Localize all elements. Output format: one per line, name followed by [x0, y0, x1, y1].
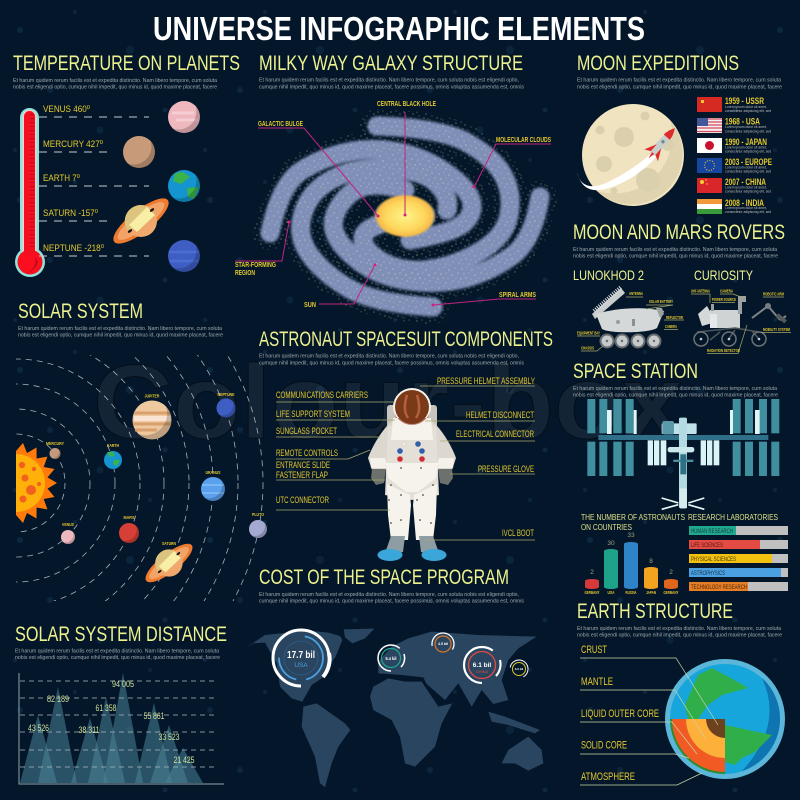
lunokhod labels: CAMERA [665, 324, 677, 329]
temperature labels: NEPTUNE -218⁰ [43, 243, 104, 254]
icon: astronaut figure [368, 388, 456, 561]
chart title: astronauts [581, 512, 685, 532]
icon: sun [16, 443, 57, 523]
icon: rocket with trail [577, 122, 682, 190]
panel: earth structure [577, 600, 785, 785]
text block: milky way intro [259, 78, 525, 90]
text block: space station intro: nobis est eligendi optio, cumque nihil impedit, quo minus id, quod maxime placeat, facere [573, 392, 778, 398]
planet labels: PLUTO [252, 512, 264, 517]
expedition notes: Lorem ipsum dolor sit amet, [725, 206, 767, 210]
icon: earth cutaway [665, 659, 785, 779]
bar labels: GERMANY [584, 590, 600, 595]
lunokhod labels: EQUIPMENT BAY [577, 330, 600, 336]
main title: UNIVERSE INFOGRAPHIC ELEMENTS [153, 10, 645, 47]
planet labels: MARS [124, 515, 134, 520]
thermometer [15, 108, 45, 277]
bar chart: number of astronauts [581, 512, 685, 595]
panel: space station [573, 360, 788, 595]
gauge: Russia [430, 631, 456, 657]
planet labels: EARTH [107, 443, 119, 448]
planet labels: VENUS [62, 522, 74, 527]
curiosity labels [691, 288, 791, 354]
bar values: 33 [627, 532, 635, 539]
bar: astrophysics: ASTROPHYSICS [691, 571, 725, 577]
temperature labels: SATURN -157⁰ [43, 208, 98, 219]
expedition notes: consectetur adipiscing elit, sed [725, 150, 771, 154]
chart values: 94 005 [112, 679, 134, 690]
gauge: China [464, 647, 500, 683]
expedition years: 1959 - USSR [725, 96, 764, 107]
text block: solar intro [18, 326, 223, 338]
astronaut labels: IVCL BOOT [502, 528, 534, 539]
chart values: 43 526 [28, 723, 49, 734]
panel: cost of space program [247, 566, 543, 787]
galaxy labels: MOLECULAR CLOUDS [496, 137, 551, 144]
bar values: 30 [607, 540, 615, 547]
heading: cost: COST OF THE SPACE PROGRAM [259, 566, 509, 589]
cylinder bars [585, 542, 678, 589]
astronaut labels: PRESSURE GLOVE [478, 464, 534, 475]
flag: Europe [697, 158, 722, 173]
chart values: 55 861 [144, 711, 164, 722]
expedition notes: Lorem ipsum dolor sit amet, [725, 146, 767, 150]
astronaut labels: ELECTRICAL CONNECTOR [456, 429, 534, 440]
galaxy labels: CENTRAL BLACK HOLE [377, 101, 436, 108]
gauge: Russia: 4.5 bil [438, 642, 448, 646]
curiosity labels: POWER SOURCE [712, 297, 736, 302]
expedition years [725, 96, 772, 209]
gauge: USA [273, 630, 330, 686]
text block: solar intro: nobis est eligendi optio, cumque nihil impedit, quo minus id, quod maxime placeat, facere [18, 332, 223, 338]
temperature labels: MERCURY 427⁰ [43, 139, 103, 150]
bar labels [584, 590, 678, 595]
subheading: lunokhod: LUNOKHOD 2 [573, 267, 644, 283]
expedition notes: consectetur adipiscing elit, sed [725, 210, 771, 214]
chart values: 82 189 [47, 694, 69, 705]
galaxy labels: STAR-FORMING [235, 262, 276, 269]
planet labels: JUPITER [144, 394, 160, 398]
chart values: 61 358 [96, 703, 116, 714]
bar labels: GERMANY [664, 590, 678, 595]
icon: moon [582, 104, 684, 206]
expedition years: 2007 - CHINA [725, 177, 766, 188]
text block: astronaut intro [259, 354, 525, 366]
panel: rovers [573, 221, 791, 354]
orbits [16, 355, 264, 601]
icon: saturn [107, 191, 175, 251]
chart values: 33 523 [158, 732, 180, 743]
lunokhod labels: ANTENNA [629, 291, 643, 296]
icon: mercury [50, 448, 61, 459]
astronaut labels: FASTENER FLAP [276, 470, 328, 481]
icon: neptune [168, 240, 200, 272]
bar: physical sciences: PHYSICAL SCIENCES [691, 557, 736, 563]
chart values: 38 311 [78, 725, 100, 736]
gauge: Japan: 3.3 bil [515, 667, 523, 671]
temperature labels: VENUS 460⁰ [43, 104, 90, 115]
text block: temperature intro: Et harum quidem rerum facilis est et expedita distinctio. Nam libero tempore, cum soluta [13, 78, 217, 84]
expedition notes [725, 105, 771, 214]
earth callout lines [580, 658, 718, 785]
bar values: 8 [649, 558, 653, 565]
text block: rovers intro: nobis est eligendi optio, cumque nihil impedit, quo minus id, quod maxime placeat, facere [573, 254, 778, 260]
curiosity labels: RADIATION DETECTOR [707, 348, 740, 353]
expedition years: 1968 - USA [725, 116, 760, 128]
expedition notes: Lorem ipsum dolor sit amet, [725, 186, 767, 190]
expedition notes: consectetur adipiscing elit, sed [725, 130, 771, 134]
chart values: 21 425 [174, 755, 194, 766]
earth labels [581, 644, 659, 783]
earth labels: LIQUID OUTER CORE [581, 708, 659, 720]
icon: pluto [249, 520, 267, 538]
chart values [28, 679, 194, 766]
heading: distance: SOLAR SYSTEM DISTANCE [15, 623, 227, 646]
gauge: China: 6.1 bil [473, 662, 491, 669]
galaxy callout lines [235, 112, 551, 306]
heading: space station: SPACE STATION [573, 360, 698, 383]
heading: temperature: TEMPERATURE ON PLANETS [13, 52, 240, 75]
text block: space station intro [573, 386, 778, 398]
panel: astronaut [259, 328, 553, 561]
heading: solar system: SOLAR SYSTEM [18, 300, 143, 323]
temperature labels: EARTH 7⁰ [43, 173, 80, 184]
galaxy labels: SUN [304, 302, 316, 309]
icon: mercury [123, 136, 155, 168]
bar labels: RUSSIA [626, 590, 637, 595]
text block: earth intro [577, 626, 782, 638]
curiosity labels: UHF ANTENNA [691, 288, 710, 294]
panel: moon expeditions [577, 52, 782, 214]
flags and years [697, 96, 772, 214]
icon: earth [104, 451, 122, 469]
expedition notes: consectetur adipiscing elit, sed [725, 170, 771, 174]
astronaut labels: SUNGLASS POCKET [276, 426, 337, 437]
bar labels: JAPAN [646, 590, 656, 595]
icon: jupiter [132, 400, 172, 440]
expedition notes: Lorem ipsum dolor sit amet, [725, 166, 767, 170]
astronaut labels: LIFE SUPPORT SYSTEM [276, 409, 350, 420]
planet labels [46, 392, 264, 546]
galaxy labels: REGION [235, 270, 255, 277]
text block: astronaut intro: Et harum quidem rerum facilis est et expedita distinctio. Nam libero tempore, cum soluta nobis est eligendi optio, [259, 354, 519, 360]
text block: rovers intro [573, 247, 778, 260]
curiosity labels: CAMERA [720, 288, 733, 294]
curiosity labels: ROBOTIC ARM [763, 292, 784, 296]
icon: venus [168, 101, 200, 133]
panel: solar system [16, 304, 267, 601]
text block: astronaut intro: cumque nihil impedit, quo minus id, quod maxime placeat, facere possimus, omnis voluptas assumenda est, omnis [259, 360, 525, 366]
expedition years: 1990 - JAPAN [725, 137, 767, 148]
text block: temperature intro [13, 78, 217, 90]
expedition years: 2008 - INDIA [725, 198, 764, 209]
lunokhod labels: CHASSIS [581, 346, 594, 350]
text block: solar intro: Et harum quidem rerum facilis est et expedita distinctio. Nam libero tempore, cum soluta [18, 326, 222, 332]
galaxy labels: GALACTIC BULGE [258, 121, 303, 128]
text block: cost intro: cumque nihil impedit, quo minus id, quod maxime placeat, facere possimus, omnis voluptas assumenda est, omnis [259, 598, 525, 604]
planet labels: NEPTUNE [218, 392, 234, 397]
astronaut labels: HELMET DISCONNECT [466, 410, 534, 421]
text block: rovers intro: Et harum quidem rerum facilis est et expedita distinctio. Nam libero tempore, cum soluta [573, 247, 777, 253]
watermark: Colour-box [93, 344, 683, 461]
heading: astronaut: ASTRONAUT SPACESUIT COMPONENTS [259, 328, 553, 351]
astronaut labels [276, 376, 535, 539]
earth labels: MANTLE [581, 676, 613, 688]
text block: milky way intro: cumque nihil impedit, quo minus id, quod maxime placeat, facere possimus, omnis voluptas assumenda est, omnis [259, 84, 525, 90]
gauge: Europe [378, 645, 405, 671]
earth labels: ATMOSPHERE [581, 771, 635, 783]
astronaut callout lines [276, 386, 535, 540]
galaxy labels: SPIRAL ARMS [499, 292, 536, 299]
icon: neptune [216, 398, 236, 418]
text block: earth intro: Et harum quidem rerum facilis est et expedita distinctio. Nam libero tempore, cum soluta [577, 626, 781, 632]
flag: China [697, 178, 722, 193]
flag: India [697, 199, 722, 214]
lunokhod labels: SOLAR BATTERY [649, 299, 673, 304]
chart title: astronauts: ON COUNTRIES [581, 522, 632, 532]
heading: milky way: MILKY WAY GALAXY STRUCTURE [259, 52, 523, 75]
planet labels: SATURN [162, 541, 176, 546]
bar values: 2 [590, 569, 594, 576]
text block: moon intro [577, 78, 782, 90]
text block: milky way intro: Et harum quidem rerum facilis est et expedita distinctio. Nam libero tempore, cum soluta nobis est eligendi optio, [259, 78, 519, 84]
gauge: Europe: 5.4 bil [386, 656, 396, 661]
text block: distance intro: nobis est eligendi optio, cumque nihil impedit, quo minus id, quod maxime placeat, facere [15, 655, 220, 661]
icon: mars [119, 523, 139, 543]
text block: temperature intro: nobis est eligendi optio, cumque nihil impedit, quo minus id, quod maxime placeat, facere [13, 84, 217, 90]
text block: distance intro [15, 648, 220, 661]
astronaut labels: UTC CONNECTOR [276, 495, 329, 506]
panel: milky way [235, 52, 551, 309]
text block: earth intro: nobis est eligendi optio, cumque nihil impedit, quo minus id, quod maxime placeat, facere [577, 632, 782, 638]
subheading: curiosity: CURIOSITY [694, 267, 754, 283]
icon: venus [61, 530, 75, 544]
bar values [590, 532, 673, 576]
earth labels: CRUST [581, 644, 607, 656]
gauge: China: CHINA [476, 669, 489, 674]
galaxy spiral [270, 126, 540, 307]
lunokhod labels [577, 291, 684, 351]
text block: space station intro: Et harum quidem rerum facilis est et expedita distinctio. Nam libero tempore, cum soluta [573, 386, 777, 392]
planet labels: URANUS [206, 470, 220, 475]
heading: earth structure: EARTH STRUCTURE [577, 600, 733, 623]
icon: uranus [201, 477, 225, 501]
bar values: 2 [669, 569, 673, 576]
text block: moon intro: nobis est eligendi optio, cumque nihil impedit, quo minus id, quod maxime placeat, facere [577, 84, 782, 90]
astronaut labels: PRESSURE HELMET ASSEMBLY [437, 376, 535, 387]
astronaut labels: ENTRANCE SLIDE [276, 460, 330, 471]
galaxy labels [235, 101, 551, 309]
icon: curiosity rover [694, 296, 787, 346]
icon: saturn [140, 538, 198, 588]
text block: cost intro [259, 592, 525, 604]
flag: USSR [697, 97, 722, 112]
gauge: Japan [509, 659, 529, 679]
flag: Japan [697, 138, 722, 153]
panel: solar system distance [15, 623, 227, 784]
gauge: USA: USA [294, 662, 308, 669]
astronaut labels: REMOTE CONTROLS [276, 448, 338, 459]
bar labels: USA [608, 590, 615, 595]
text block: cost intro: Et harum quidem rerum facilis est et expedita distinctio. Nam libero tempore, cum soluta nobis est eligendi optio, [259, 592, 519, 598]
bar: human research: HUMAN RESEARCH [691, 529, 733, 535]
bar: technology research: TECHNOLOGY RESEARCH [691, 585, 747, 591]
text block: distance intro: Et harum quidem rerum facilis est et expedita distinctio. Nam libero tempore, cum soluta [15, 648, 219, 654]
lunokhod labels: REFLECTOR [666, 315, 683, 320]
text block: moon intro: Et harum quidem rerum facilis est et expedita distinctio. Nam libero tempore, cum soluta [577, 78, 781, 84]
icon: lunokhod rover [592, 287, 664, 348]
icon: earth [168, 170, 200, 202]
temperature labels [43, 104, 104, 254]
expedition notes: consectetur adipiscing elit, sed [725, 190, 771, 194]
triangle chart [19, 673, 224, 784]
world map [247, 629, 543, 787]
panel: temperature on planets [13, 52, 240, 277]
icon: ISS [587, 399, 779, 509]
expedition notes: Lorem ipsum dolor sit amet, [725, 105, 767, 109]
temperature dashed guides [39, 117, 149, 256]
earth labels: SOLID CORE [581, 740, 627, 752]
chart title: research: RESEARCH LABORATORIES [688, 512, 778, 522]
heading: moon expeditions: MOON EXPEDITIONS [577, 52, 739, 75]
bar chart: research laboratories [688, 512, 788, 591]
planet labels: MERCURY [46, 441, 64, 446]
expedition notes: consectetur adipiscing elit, sed [725, 109, 771, 113]
bar: life sciences: LIFE SCIENCES [691, 543, 723, 549]
chart title: astronauts: THE NUMBER OF ASTRONAUTS [581, 512, 685, 522]
gauge: USA: 17.7 bil [287, 649, 315, 661]
expedition years: 2003 - EUROPE [725, 157, 772, 168]
flag: USA [697, 118, 722, 133]
expedition notes: Lorem ipsum dolor sit amet, [725, 125, 767, 129]
astronaut labels: COMMUNICATIONS CARRIERS [276, 390, 368, 401]
